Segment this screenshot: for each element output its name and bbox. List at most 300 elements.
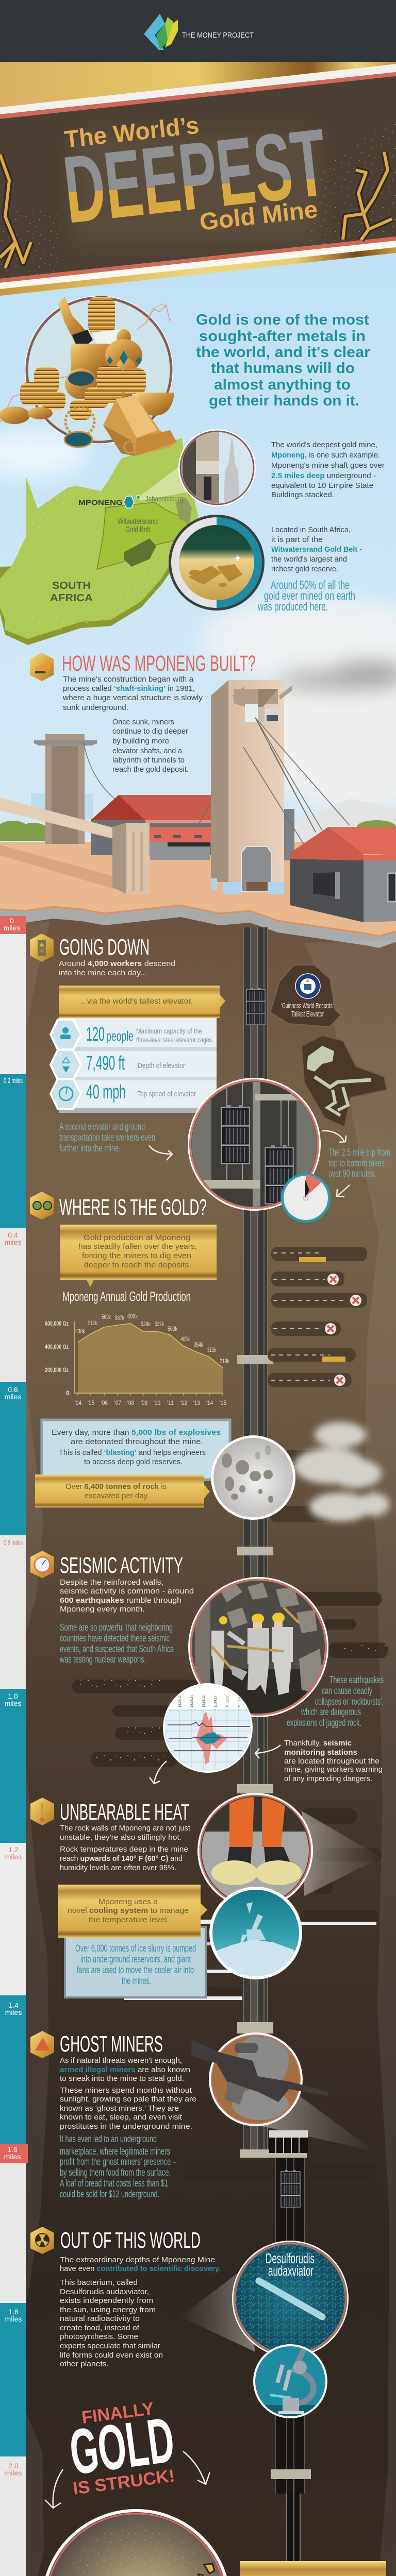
depth label 0.4: 0.4 (8, 1231, 18, 1239)
body text: These miners spend months without (60, 2086, 192, 2095)
y axis labels: 600,000 Oz (45, 1320, 69, 1327)
intro: into the mine each day... (59, 969, 147, 977)
icon: elevator badge (30, 934, 54, 962)
rifle (191, 2040, 328, 2105)
heading: UNBEARABLE HEAT (60, 1800, 189, 1825)
data labels: 532k (155, 1320, 164, 1328)
seismograph time labels: 11:35:17 (226, 1695, 229, 1707)
body text: 600 earthquakes rumble through (60, 1596, 182, 1605)
depth marker 1.6: miles (4, 2153, 21, 2161)
depth label 1.4 (5, 2001, 22, 2016)
arched opening (241, 846, 271, 891)
intro headline: sought-after metals in (199, 328, 366, 345)
icon: gauge badge (30, 1551, 54, 1578)
circle: ice (206, 1887, 304, 1979)
blast tunnels (270, 1450, 332, 1522)
body text: bacterium (60, 2278, 163, 2368)
gold bars (103, 395, 177, 456)
text: digging deeper: Once sunk, miners (112, 718, 174, 726)
text: Witwatersrand: Located in South Africa, (271, 526, 351, 534)
icon: excavator badge (30, 653, 54, 681)
Swaziland (175, 497, 192, 523)
icon: radiation badge (30, 2227, 54, 2254)
cave wall right (304, 940, 396, 2576)
icon: warning badge (30, 2031, 54, 2058)
champagne bottle (58, 296, 92, 346)
body text: As if natural threats weren't enough, (60, 2056, 182, 2065)
winch (265, 708, 280, 722)
coin stacks (20, 366, 146, 420)
gray strata strip (0, 905, 396, 948)
panel: blasting: to access deep gold reserves. (84, 1458, 183, 1466)
teal note (60, 2134, 176, 2200)
text: monitoring stations: monitoring stations (284, 1748, 357, 1757)
x axis labels: '11 (167, 1399, 174, 1406)
text: monitoring stations: Thankfully, seismic (284, 1739, 352, 1748)
loader (322, 1357, 345, 1362)
red stripe top (0, 72, 396, 119)
circle: blasted rock (211, 1435, 295, 1520)
stat: speed: 40 mph (86, 1081, 126, 1103)
teal note (59, 1622, 174, 1665)
faces (253, 1621, 283, 1629)
callout: 50% of gold: was produced here. (257, 600, 328, 613)
body text: The extraordinary depths of Mponeng Mine (60, 2256, 215, 2264)
surface mine buildings (0, 680, 396, 936)
section: unbearable heat (30, 1793, 382, 2000)
arrow: to seismograph (255, 1745, 280, 1758)
Lesotho (124, 538, 156, 567)
teal note: could be sold for $12 underground. (60, 2189, 159, 2200)
icon: The Money Project logo (144, 14, 178, 50)
text: digging deeper (112, 718, 189, 774)
gold callout: rock excavated: Over 6,400 tonnes of rock is (65, 1482, 167, 1491)
gold vein left (0, 155, 31, 268)
data labels: 219k (220, 1358, 230, 1365)
title: finally gold is struck (66, 2399, 178, 2499)
body text: armed illegal miners are also known (60, 2065, 190, 2074)
panel: blasting: Every day, more than 5,000 lbs of explosives (52, 1428, 221, 1437)
depth label 1.4: 1.4 (8, 2001, 19, 2009)
arrow: from elevator (322, 1131, 346, 1142)
gold speckles (0, 206, 62, 279)
intro headline: Gold is one of the most (196, 312, 369, 328)
tunnels with depleted markers (268, 1247, 367, 1387)
x axis labels: '06 (101, 1399, 108, 1406)
dinosaur fossil (302, 1036, 387, 1127)
depth label 1.0 (5, 1692, 21, 1707)
gold callout: cooling (58, 1885, 207, 1938)
ground (0, 842, 396, 936)
body text: reach upwards of 140° F (60° C) and (60, 1854, 183, 1863)
miner center (227, 1628, 269, 1695)
section: ghost miners (30, 2031, 374, 2207)
stat: capacity (51, 1020, 212, 1049)
body text: bacterium: the sun, using energy from (60, 2306, 156, 2314)
text: monitoring stations: are located throughout the (284, 1757, 380, 1766)
circle: microscope (253, 2339, 327, 2420)
seismograph time labels (179, 1695, 241, 1707)
body text: bacterium: experts speculate that similar (60, 2342, 160, 2350)
text: deepest mine: Mponeng's mine shaft goes over (271, 461, 385, 470)
depth label 1.2: 1.2 (8, 1845, 19, 1854)
x axis labels: '07 (114, 1399, 121, 1406)
text: monitoring stations (284, 1739, 383, 1783)
icon: goggles badge (30, 1192, 54, 1219)
header bar (0, 0, 396, 62)
icon: hexagon marker (124, 496, 134, 508)
text: deepest mine: Buildings stacked. (271, 490, 334, 499)
gold callout: deeper to reach the deposits. (84, 1261, 191, 1269)
orange ground edge (0, 905, 396, 936)
text: digging deeper: labyrinth of tunnels to (112, 756, 185, 765)
gold dots (31, 489, 98, 531)
body text: bacterium: This bacterium, called (60, 2278, 138, 2287)
gold callout: ...via the world's tallest elevator. (80, 997, 193, 1006)
panel: blasting: are detonated throughout the mine. (71, 1437, 203, 1446)
section: out of this world (30, 2227, 349, 2420)
depth label 0.6: 0.6 (8, 1385, 18, 1394)
body text: known as ‘ghost miners.’ They are (60, 2104, 179, 2113)
data labels: 529k (141, 1320, 151, 1328)
body text: seismic activity is common - around (60, 1587, 194, 1596)
label Mponeng: MPONENG (78, 498, 123, 506)
depth label 1.0: miles (5, 1699, 21, 1707)
arrow: to reef right (183, 2451, 210, 2484)
gold callout: cooling: novel cooling system to manage (68, 1906, 189, 1915)
depth marker 0 miles: 0 (10, 917, 14, 925)
oil lamp bowl (136, 393, 174, 416)
depth marker 1.6 (0, 2144, 28, 2163)
body text: sunlight, growing so pale that they are (60, 2095, 196, 2104)
gold treasure illustration (0, 296, 177, 456)
body text: bacterium: exists independently from (60, 2296, 153, 2305)
gold vein right (343, 152, 392, 240)
body text: bacterium: natural radioactivity to (60, 2314, 140, 2323)
circle frame (25, 296, 173, 444)
circle: bacterium: Desulforudis (266, 2250, 315, 2266)
label gold belt line two: Gold Belt (125, 526, 150, 534)
teal note: was testing nuclear weapons. (59, 1654, 146, 1665)
seismograph time labels: 18:36:34 (191, 1695, 194, 1707)
arrow: to elevator (149, 1145, 172, 1160)
cable left tower (84, 742, 114, 799)
body text: to sneak into the mine to steal gold. (60, 2074, 184, 2083)
support pillar (112, 823, 150, 894)
dot: Johannesburg (136, 496, 140, 499)
arrow: to reef left (45, 2469, 63, 2508)
section: seismic activity (30, 1551, 388, 2350)
title: Gold Mine: Gold Mine (198, 195, 319, 235)
stats panel (51, 1018, 217, 1113)
text: deepest mine: The world's deepest gold mine, (271, 440, 377, 449)
intro headline (196, 312, 370, 409)
elevator platform (269, 2130, 308, 2153)
icon: elevator cage (246, 988, 266, 1025)
intro headline: almost anything to (214, 377, 351, 393)
title: finally gold is struck: IS STRUCK! (72, 2466, 176, 2499)
panel: ice slurry: Over 6,000 tonnes of ice slurry is pumped (75, 1943, 196, 1954)
body text: The rock walls of Mponeng are not just (60, 1824, 191, 1833)
text: second elevator (59, 1122, 155, 1154)
trees right (357, 820, 396, 834)
label gold belt: Witwatersrand (118, 517, 158, 526)
sky background (0, 247, 396, 927)
closed tunnel markers (325, 1274, 361, 1386)
red roof building (91, 795, 212, 855)
y axis labels: 0 (66, 1389, 70, 1397)
dust sparkles (59, 2527, 213, 2576)
gold band bottom (0, 247, 396, 296)
text: shaft-sinking (62, 675, 203, 712)
body text: known to eat, sleep, and even visit (60, 2113, 183, 2122)
icon: elevator cage lower (280, 2170, 301, 2208)
stat: speed (51, 1079, 196, 1109)
panel: blasting (42, 1420, 230, 1480)
data labels (75, 1313, 230, 1365)
circle: Ventersdorp Contact Reef (41, 2509, 231, 2576)
section: going down (0, 934, 396, 2576)
market chart lines (0, 304, 170, 422)
text: monitoring stations: mine, giving workers warning (284, 1765, 383, 1774)
stat: capacity: 120 (86, 1024, 105, 1045)
clock (281, 1173, 331, 1223)
text: Witwatersrand: it is part of the (271, 535, 323, 544)
x axis labels: '15 (220, 1399, 226, 1406)
back building behind tower (284, 809, 294, 860)
heading: how was Mponeng built (30, 651, 256, 681)
depth label 2.0: miles (5, 2469, 22, 2477)
body text: Mponeng every month. (60, 1605, 145, 1614)
text: deepest mine: Mponeng, is one such example. (271, 451, 380, 460)
x axis labels: '09 (141, 1399, 147, 1406)
x axis labels: '10 (154, 1399, 160, 1406)
shovel handle (211, 1607, 299, 1669)
gold callout (60, 1225, 217, 1287)
pendant (64, 432, 92, 447)
intro: Around 4,000 workers descend (59, 959, 175, 968)
body text: have even contributed to scientific discovery. (60, 2264, 221, 2273)
gold callout: has steadily fallen over the years, (78, 1242, 197, 1251)
depth marker 1.6: 1.6 (7, 2145, 18, 2154)
seismograph time labels: 18:23:17 (179, 1695, 182, 1707)
body text (60, 1578, 194, 1614)
data labels: 500k (168, 1325, 178, 1332)
x axis labels: '14 (206, 1399, 213, 1406)
circle: armed miner (191, 2032, 328, 2126)
depth label 1.2 (5, 1845, 22, 1861)
body text: Rock temperatures deep in the mine (60, 1845, 188, 1854)
intro (59, 959, 175, 977)
cables (197, 718, 350, 845)
icon: thermometer badge (30, 1798, 54, 1825)
depth label 1.4: miles (5, 2008, 22, 2016)
teal note: Some are so powerful that neighboring (60, 1622, 173, 1633)
panel: blasting: This is called ‘blasting’ and helps engineers (59, 1448, 206, 1457)
gold callout: rock excavated: excavated per day. (85, 1492, 149, 1500)
depth label 1.8 (5, 2308, 22, 2323)
gold band top (0, 62, 396, 107)
seismograph time labels: 18:63:12 (203, 1695, 206, 1707)
heading: SEISMIC ACTIVITY (60, 1553, 183, 1578)
label Africa: AFRICA (50, 592, 93, 604)
map side depth (0, 562, 178, 645)
x axis labels: '13 (193, 1399, 200, 1406)
stat: depth (51, 1050, 185, 1080)
panel: ice slurry: fans are used to move the cooler air into (77, 1965, 194, 1976)
title: The World's: The World’s (63, 111, 201, 153)
x axis labels (75, 1399, 226, 1406)
y axis labels: 200,000 Oz (45, 1366, 69, 1374)
data labels: 600k (127, 1313, 138, 1320)
depth label 0.2: 0.2 miles (4, 1076, 23, 1084)
roof fins (233, 686, 244, 700)
teal note: profit from the ghost miners’ presence – (60, 2157, 176, 2167)
data labels: 438k (75, 1328, 86, 1335)
arrow: to clock (337, 1185, 350, 1197)
label South: SOUTH (52, 580, 91, 591)
body text: bacterium: life forms could even exist on (60, 2351, 163, 2360)
logo wordmark: THE MONEY PROJECT (182, 31, 254, 40)
distant hills (289, 799, 396, 845)
gold callout: forcing the miners to dig even (82, 1251, 191, 1260)
blast dust cloud (294, 1422, 389, 1521)
depth label 1.0: 1.0 (8, 1692, 18, 1700)
shovel head (231, 1665, 248, 1681)
depth label 2.0 (5, 2462, 22, 2477)
stat: speed: Top speed of elevator (137, 1090, 196, 1098)
title banner (0, 62, 396, 296)
heading: GHOST MINERS (60, 2031, 163, 2057)
depth label 0.4 (5, 1231, 21, 1246)
text: Witwatersrand: richest gold reserve. (271, 565, 338, 573)
body text: prostitutes in the underground mine. (60, 2122, 192, 2131)
body text: unstable, they're also stiflingly hot. (60, 1833, 182, 1842)
gold callout: Gold production at Mponeng (84, 1233, 190, 1242)
circle: miner boots (197, 1793, 314, 1908)
trees left (0, 821, 48, 841)
Guinness World Records plaque: Tallest Elevator (291, 1010, 324, 1019)
body text: bacterium: other planets. (60, 2360, 109, 2368)
depth label 0.6: miles (5, 1393, 21, 1401)
clouds (0, 430, 396, 809)
body text (60, 2256, 221, 2273)
text: rockbursts (287, 1675, 384, 1728)
miner left (211, 1631, 224, 1686)
cave wall left (26, 922, 50, 2576)
panel: ice slurry: the mines. (122, 1976, 151, 1987)
trophy gems (107, 350, 142, 365)
circle: mine shaft vs Empire State Building (178, 428, 256, 510)
text: deepest mine: 2.5 miles deep underground - (271, 471, 376, 480)
gold callout (59, 986, 225, 1018)
data labels: 569k (102, 1313, 111, 1320)
main tower (211, 680, 292, 894)
light cone: gun (258, 2092, 374, 2151)
conveyor beam (0, 798, 124, 841)
depth label 1.8: 1.8 (8, 2308, 19, 2316)
depth label 1.8: miles (5, 2315, 22, 2323)
x axis labels: '05 (88, 1399, 94, 1406)
stat: depth: Depth of elevator (138, 1061, 185, 1070)
red stripe bottom (0, 236, 396, 283)
text: second elevator: A second elevator and ground (59, 1122, 145, 1132)
panel: ice slurry: into underground reservoirs, and giant (80, 1954, 191, 1965)
stat: capacity: people (106, 1028, 134, 1044)
champagne label (72, 330, 93, 346)
gold callout: cooling: Mponeng uses a (98, 1897, 158, 1906)
title: finally gold is struck: GOLD (66, 2404, 178, 2488)
Guinness badge (295, 974, 320, 998)
text: Witwatersrand (271, 526, 362, 573)
data labels: 405k (180, 1335, 190, 1343)
intro headline: that humans will do (211, 360, 355, 377)
shaft collars (237, 1355, 311, 2479)
text: shaft-sinking: process called ‘shaft-sinking’ in 1981, (63, 684, 195, 693)
depth label 0.6 (5, 1385, 21, 1401)
y axis labels: 400,000 Oz (45, 1343, 69, 1350)
stat: depth: 7,490 ft (86, 1053, 125, 1074)
title: finally gold is struck: FINALLY (80, 2399, 155, 2428)
text: shaft-sinking: The mine's construction began with a (63, 675, 194, 684)
gold callout: rock excavated (35, 1475, 210, 1507)
text: digging deeper: elevator shafts, and a (112, 747, 183, 755)
callout: 50% of gold (257, 578, 355, 613)
text: Witwatersrand: Witwatersrand Gold Belt - (271, 545, 362, 554)
text: rockbursts: can cause deadly (322, 1686, 372, 1697)
callout: 50% of gold: gold ever mined on earth (264, 589, 355, 602)
text: digging deeper: by building more (112, 737, 169, 745)
heading: OUT OF THIS WORLD (60, 2228, 201, 2253)
chart title: Mponeng Annual Gold Production (62, 1289, 191, 1304)
text: deepest mine: equivalent to 10 Empire State (271, 481, 373, 490)
data labels: 354k (194, 1341, 204, 1348)
body text: bacterium: create food, instead of (60, 2324, 140, 2332)
tall coin stack (88, 296, 115, 335)
data labels: 587k (115, 1314, 125, 1321)
text: Witwatersrand: the world's largest and (271, 555, 347, 564)
gold fragments (103, 2564, 214, 2576)
heading: GOING DOWN (59, 935, 150, 960)
light cone: boots (302, 1811, 382, 1896)
x axis labels: '08 (127, 1399, 134, 1406)
depth marker 0 miles (0, 916, 26, 934)
white stripe top (0, 64, 396, 114)
teal note: by selling them food from the surface. (60, 2167, 171, 2178)
y axis labels (45, 1320, 70, 1397)
body text: Despite the reinforced walls, (60, 1578, 163, 1587)
circle: miners (188, 1577, 328, 1721)
teal note: It has even led to an underground (60, 2134, 157, 2145)
Guinness World Records plaque: ‘Guinness World Records’ (281, 1002, 334, 1010)
base tiles (223, 882, 241, 894)
text: digging deeper: reach the gold deposit. (112, 765, 189, 774)
map of South Africa (0, 438, 199, 645)
body text: humidity levels are often over 95%. (60, 1863, 176, 1872)
text: monitoring stations: of any impending dangers. (284, 1774, 372, 1783)
right red-roof house (290, 827, 396, 922)
text: second elevator: further into the mine. (59, 1143, 121, 1154)
circle: bacterium: audaxviator (268, 2263, 314, 2279)
callout: 50% of gold: Around 50% of all the (271, 578, 350, 591)
heading text: HOW WAS MPONENG BUILT? (62, 651, 256, 676)
body text: bacterium: Desulforudis audaxviator, (60, 2287, 149, 2296)
necklace (65, 407, 94, 436)
teapot (65, 368, 97, 399)
white stripe bottom (0, 241, 396, 289)
circle: elevators close-up (188, 1077, 322, 1211)
text: rockbursts: which are dangerous (301, 1707, 361, 1718)
